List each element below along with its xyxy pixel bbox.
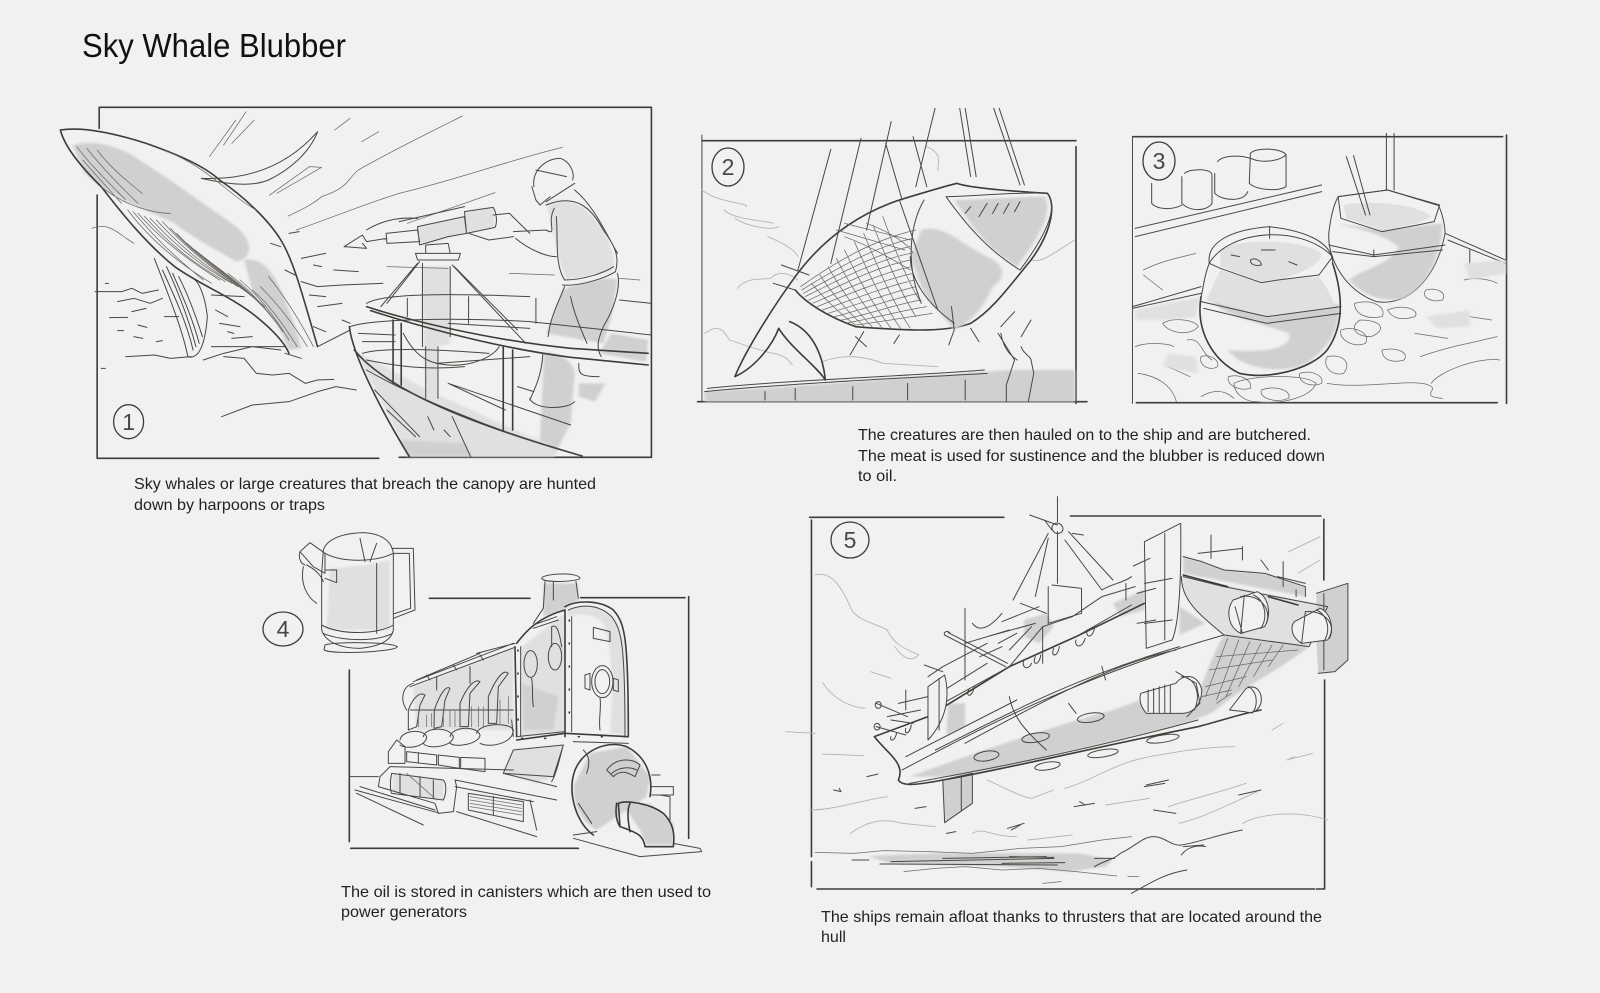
whale pleats — [77, 147, 313, 347]
caption 4 — [341, 884, 711, 921]
number badge 5 — [831, 522, 869, 558]
generator housing and pipe — [572, 745, 651, 835]
floor rocks and puddles — [1132, 233, 1505, 308]
harpooner figure — [513, 158, 618, 408]
canister — [299, 533, 415, 652]
floor washes — [1135, 260, 1505, 373]
harpoon gun — [344, 207, 530, 260]
caption 1: down by harpoons or traps — [134, 497, 325, 514]
whale lower fin — [154, 258, 207, 357]
caption 4: The oil is stored in canisters which are then used to — [341, 884, 711, 901]
sky clouds — [786, 537, 1328, 840]
horizon shadow wash — [869, 853, 1113, 872]
mast and rigging — [1013, 497, 1131, 623]
gauges and porthole — [524, 626, 618, 730]
ship deck — [705, 370, 987, 400]
tripod and deck rails — [350, 262, 651, 425]
number badge 4: 4 — [277, 616, 290, 642]
caption 2 — [858, 427, 1325, 485]
lower fin — [943, 773, 972, 823]
generator cab — [515, 602, 628, 740]
panel 2: hauling the creature — [698, 108, 1087, 403]
net ties — [773, 265, 979, 355]
front pot — [1200, 227, 1341, 375]
number badge 2: 2 — [722, 154, 734, 180]
panel 3: rendering pots — [1132, 133, 1507, 403]
caption 1: Sky whales or large creatures that breach the canopy are hunted — [134, 476, 596, 493]
number badge 1: 1 — [122, 409, 135, 435]
ship — [874, 497, 1348, 823]
panel 5 frame — [810, 516, 1325, 889]
caption 5 — [821, 909, 1322, 946]
caption 5: hull — [821, 929, 846, 946]
central fin — [1144, 523, 1181, 648]
right stern fin — [1316, 583, 1348, 673]
fish tail — [735, 277, 825, 380]
superstructure — [928, 535, 1305, 703]
panel 4: canister and generator — [299, 533, 702, 857]
front rail — [367, 307, 648, 430]
panel 1: whale hunt — [60, 107, 651, 458]
engine block — [388, 643, 515, 772]
chimney — [533, 574, 580, 623]
panel 4 frame — [349, 597, 689, 848]
fish — [735, 183, 1052, 380]
caption 1 — [134, 476, 596, 514]
panel 1 frame — [97, 107, 651, 458]
caption 2: to oil. — [858, 468, 897, 485]
fish body — [795, 183, 1052, 330]
shelf and cans — [1135, 149, 1322, 237]
thrusters — [1229, 592, 1268, 633]
caption 4: power generators — [341, 904, 467, 921]
birds — [834, 774, 1261, 858]
engine base and shaft — [350, 767, 557, 837]
net lines — [899, 200, 954, 323]
rivets — [518, 620, 625, 738]
number badge 3 — [1143, 142, 1175, 180]
hull outline — [874, 603, 1261, 784]
whale — [60, 129, 318, 357]
panel 5: flying ship — [786, 497, 1348, 893]
water and sky strokes — [95, 232, 383, 417]
boat hull — [349, 327, 582, 457]
whale body outline — [60, 129, 318, 353]
panel 3 frame — [1133, 135, 1507, 403]
fish mouth — [954, 197, 1047, 267]
hoist ropes — [798, 108, 1024, 270]
caption 2: The creatures are then hauled on to the ship and are butchered. — [858, 427, 1311, 444]
horizon and clouds — [815, 837, 1139, 883]
panel 1 grey washes — [73, 143, 648, 457]
number badge 5: 5 — [844, 527, 856, 553]
beam on deck — [944, 632, 1008, 667]
caption 5: The ships remain afloat thanks to thrusters that are located around the — [821, 909, 1322, 926]
panel 2 background clouds — [702, 147, 1075, 367]
number badge 1 — [114, 405, 144, 439]
caption 2: The meat is used for sustinence and the blubber is reduced down — [858, 448, 1325, 465]
panel 2 frame — [698, 141, 1087, 403]
generator washes — [392, 583, 673, 845]
stern hatching — [1202, 638, 1298, 703]
crew figure — [998, 312, 1034, 402]
hull hatches — [974, 713, 1179, 770]
hull washes — [909, 557, 1328, 777]
number badge 4 — [263, 612, 303, 646]
rear pot — [1329, 190, 1445, 302]
front fin — [928, 675, 947, 740]
deck wash — [705, 370, 1075, 402]
title: Sky Whale Blubber — [82, 27, 346, 64]
whale pectoral fin — [201, 132, 318, 184]
number badge 2 — [712, 148, 744, 186]
stirring paddle and hoist — [1346, 133, 1394, 215]
number badge 3: 3 — [1153, 148, 1165, 174]
